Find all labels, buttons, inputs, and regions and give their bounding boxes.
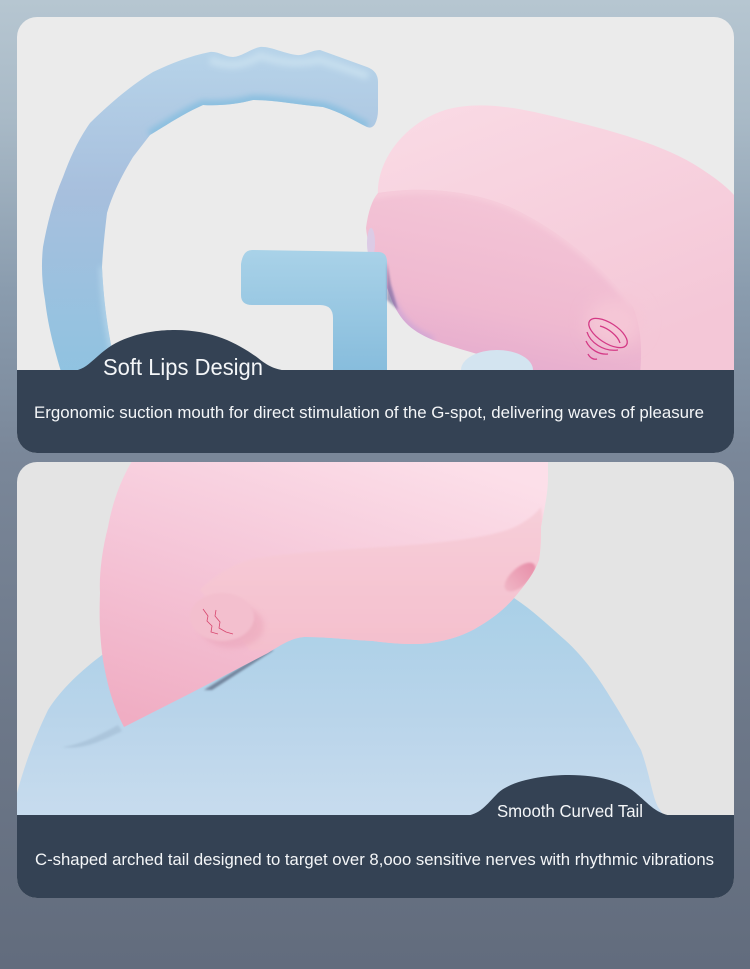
heading: Smooth Curved Tail	[497, 801, 643, 821]
caption bar	[17, 370, 734, 453]
description: Ergonomic suction mouth for direct stimulation of the G-spot, delivering waves of pleasure	[34, 403, 704, 422]
tail crease	[68, 726, 121, 748]
lower lobe fold	[272, 509, 542, 650]
panel: soft lips design	[17, 17, 734, 453]
panel background	[17, 17, 734, 453]
panel background	[17, 462, 734, 898]
caption bar	[17, 815, 734, 898]
suction mouth edge	[367, 228, 375, 252]
pink device lower lobe	[366, 190, 641, 370]
heading tab	[72, 330, 290, 371]
side button shadow	[210, 610, 264, 647]
device shadow crease	[204, 650, 274, 690]
suction mouth	[504, 562, 536, 592]
light blue nub	[461, 350, 533, 370]
swirl vibration icon	[586, 318, 628, 360]
pink device upper lobe	[378, 105, 734, 375]
description: C-shaped arched tail designed to target over 8,ooo sensitive nerves with rhythmic vibrations	[35, 850, 714, 869]
wave vibration icon	[203, 609, 233, 634]
panel: smooth curved tail	[17, 455, 734, 898]
blue curved tail	[17, 598, 667, 820]
contact shadow	[387, 262, 398, 310]
letter G arc	[35, 40, 385, 380]
product illustration: letter G and pink device	[35, 40, 734, 390]
letter G bar	[241, 250, 387, 375]
button highlight	[591, 306, 637, 344]
pink device body	[90, 455, 560, 735]
heading tab	[464, 775, 675, 816]
side button	[200, 606, 254, 641]
heading: Soft Lips Design	[103, 354, 263, 380]
product illustration: blue tail and pink device	[17, 455, 667, 820]
